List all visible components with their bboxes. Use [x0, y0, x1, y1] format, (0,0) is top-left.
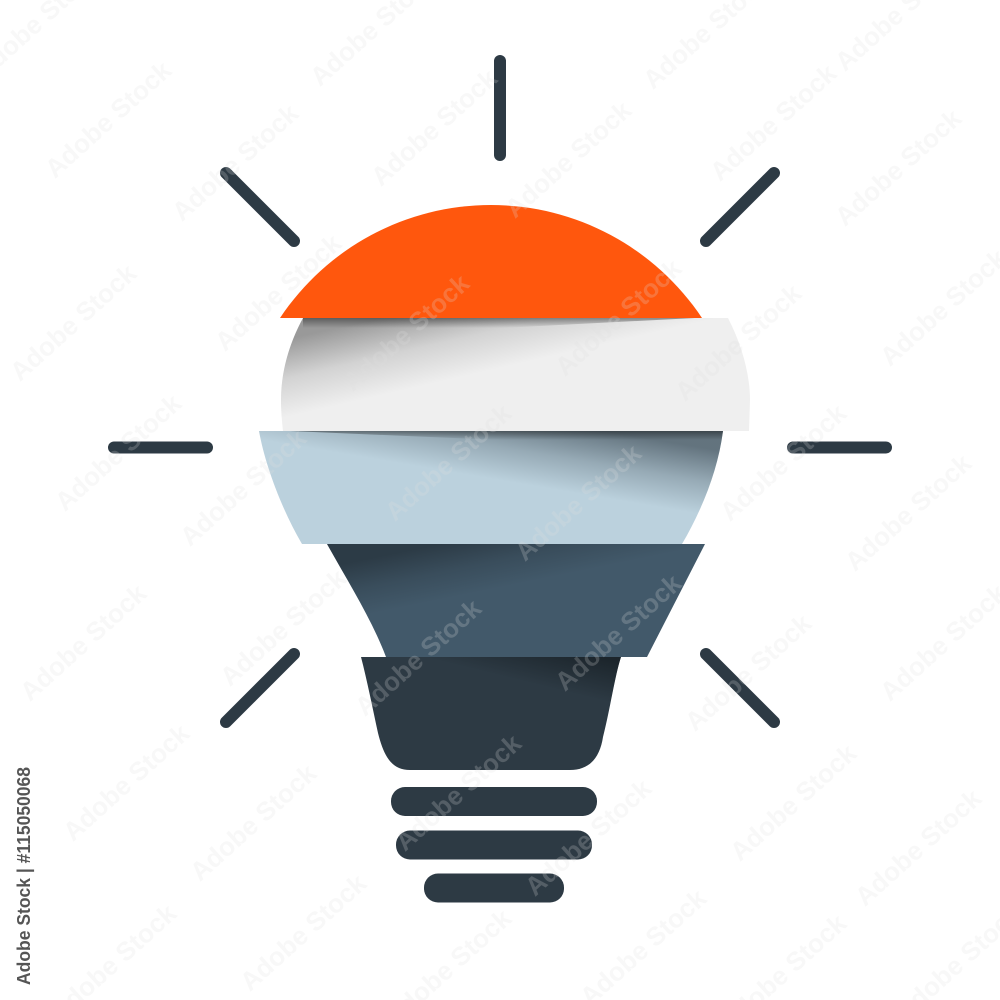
bulb segment: light blue with shadow [259, 431, 723, 544]
bulb screw base: bar 3 [424, 874, 564, 902]
stock watermark: Adobe Stock [209, 228, 347, 357]
stock watermark: Adobe Stock [829, 103, 967, 232]
stock watermark: Adobe Stock [669, 278, 807, 407]
stock watermark: Adobe Stock [184, 758, 322, 887]
stock watermark: Adobe Stock [14, 578, 152, 707]
bulb screw base: bar 2 [396, 830, 592, 860]
stock watermark: Adobe Stock [337, 268, 475, 397]
light rays [114, 61, 886, 722]
bulb segment: slate blue with shadow [327, 544, 705, 657]
bulb segment: orange dome [280, 205, 702, 318]
stock watermark: Adobe Stock [549, 253, 687, 382]
stock watermark: Adobe Stock [174, 423, 312, 552]
stock watermark: Adobe Stock [549, 568, 687, 697]
stock watermark: Adobe Stock [349, 593, 487, 722]
stock watermark: Adobe Stock [39, 55, 177, 184]
stock watermark: Adobe Stock [365, 63, 503, 192]
bulb segment: white with shadow [281, 318, 750, 431]
stock watermark: Adobe Stock [214, 563, 352, 692]
stock watermark: Adobe Stock [4, 258, 142, 387]
stock watermark: Adobe Stock [704, 58, 842, 187]
stock watermark: Adobe Stock [724, 738, 862, 867]
stock watermark: Adobe Stock [714, 398, 852, 527]
stock watermark: Adobe Stock [57, 718, 195, 847]
stock watermark: Adobe Stock [379, 398, 517, 527]
bulb screw base: bar 1 [391, 787, 597, 816]
stock watermark: Adobe Stock [519, 773, 657, 902]
stock watermark: Adobe Stock [839, 448, 977, 577]
stock watermark: Adobe Stock [499, 95, 637, 224]
stock watermark: Adobe Stock [849, 783, 987, 912]
vertical stock id caption: Adobe Stock | #115050068 [14, 767, 34, 985]
bulb segment: dark base with shadow [361, 657, 621, 770]
stock watermark: Adobe Stock [234, 868, 372, 997]
stock watermark: Adobe Stock [49, 388, 187, 517]
stock watermark: Adobe Stock [166, 98, 304, 227]
stock watermark: Adobe Stock [389, 728, 527, 857]
stock watermark: Adobe Stock [679, 608, 817, 737]
stock watermark: Adobe Stock [509, 438, 647, 567]
